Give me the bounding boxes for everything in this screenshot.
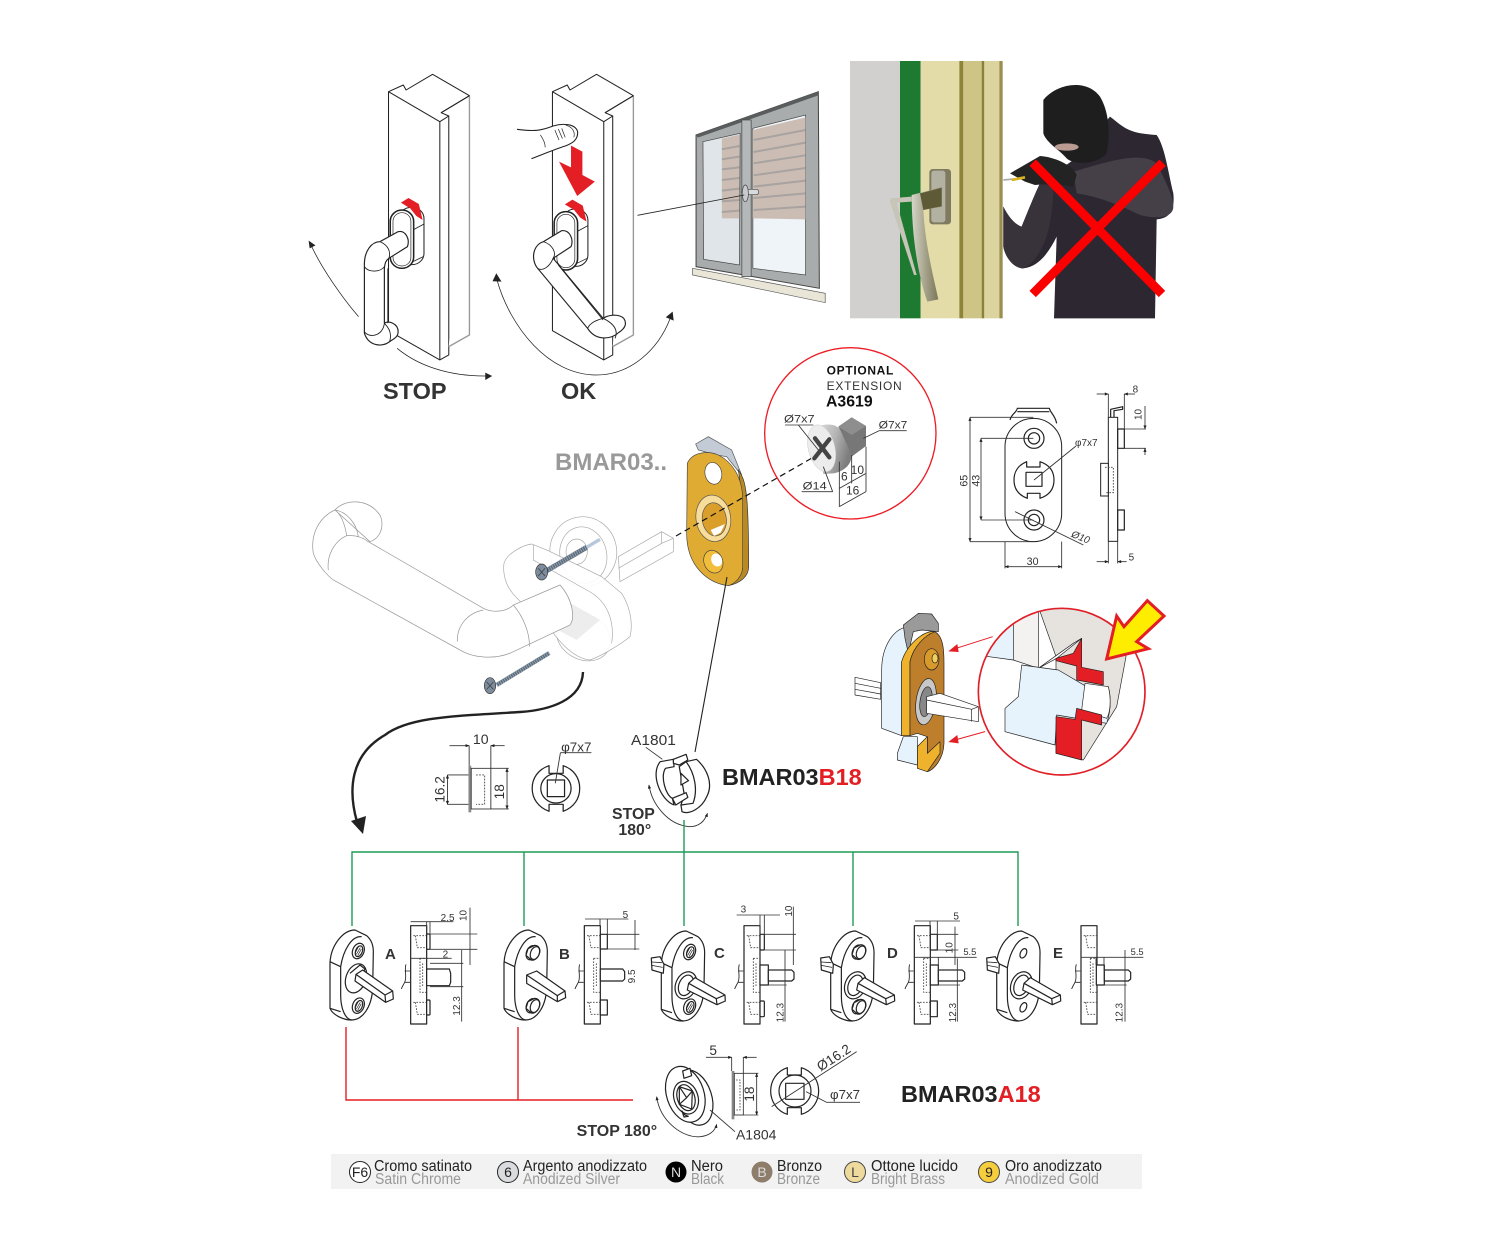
product code: BMAR03A18: BMAR03A18 [901, 1081, 1041, 1107]
plate front dimensions: 30 [1027, 556, 1039, 568]
extension dimensions: 10 [851, 463, 864, 477]
finish: satin chrome: Cromo satinato [374, 1158, 472, 1175]
finish: bright brass [844, 1158, 958, 1188]
finish: anodized silver: Anodized Silver [523, 1171, 620, 1188]
variant D dimensions: 5 [953, 912, 959, 923]
leader: A1801 [646, 747, 662, 759]
variant E dimensions: 12.3 [1115, 1002, 1126, 1022]
variant D dimensions: 12.3 [948, 1002, 959, 1022]
label: A1801: A1801 [631, 732, 676, 749]
A1804 stop part [659, 1061, 720, 1130]
side dimension drawing: 16.2 [431, 776, 447, 803]
finish: bronze: Bronzo [777, 1158, 822, 1175]
plate front view [1005, 408, 1062, 542]
label: variant C: C [714, 945, 725, 962]
extension dimensions: Ø14 [803, 480, 827, 492]
gold mounting plate [687, 437, 749, 586]
exploded handle illustration [313, 437, 749, 694]
finish: satin chrome: Satin Chrome [375, 1171, 461, 1188]
arrowhead: STOP right [485, 373, 492, 380]
arrow: A1804 rotation [657, 1097, 717, 1137]
finish: black: Nero [691, 1158, 723, 1175]
finish: bronze: Bronze [777, 1171, 820, 1188]
STOP handle illustration [364, 74, 469, 360]
arrow: yellow pointer [1107, 601, 1164, 659]
photo: burglar [1003, 85, 1174, 318]
variant B dimensions [585, 910, 639, 983]
label: EXTENSION: EXTENSION [827, 379, 902, 393]
OK handle illustration [534, 74, 633, 360]
variant A side [401, 926, 451, 1024]
label: 180 degrees: 180° [618, 822, 651, 839]
finish: anodized silver [498, 1158, 647, 1188]
finish: anodized silver: Argento anodizzato [523, 1158, 647, 1175]
label: A3619: A3619 [826, 394, 873, 411]
legend background [331, 1154, 1142, 1189]
variant B side [575, 926, 625, 1024]
zoom detail circle [978, 608, 1146, 776]
label: OPTIONAL: OPTIONAL [827, 364, 893, 378]
variant B dimensions: 9.5 [627, 969, 638, 983]
panel: photo of handle and burglar [850, 61, 1174, 318]
variant A dimensions: 12.3 [452, 996, 463, 1016]
label: A1804: A1804 [736, 1126, 777, 1142]
variant C side [735, 926, 794, 1024]
arrow: press down [559, 146, 595, 196]
front dimension drawing [532, 740, 591, 811]
screw: lower [484, 653, 549, 694]
variant D plate [821, 931, 895, 1021]
arrowhead: bottom pointer [948, 735, 959, 743]
A1801 stop part [656, 754, 710, 813]
plate side view [1101, 407, 1124, 541]
variant A dimensions: 10 [459, 909, 470, 921]
variant C dimensions [737, 904, 796, 1022]
arrowhead: top pointer [948, 644, 959, 652]
side dimension drawing: 10 [473, 731, 489, 747]
front dimension drawing [771, 1041, 860, 1114]
connector: red lines [346, 1027, 633, 1100]
finish: bronze: B [757, 1164, 767, 1180]
finish: anodized silver: 6 [504, 1164, 512, 1180]
panel: BMAR03A18 option [577, 1041, 860, 1142]
variant A dimensions: 2 [443, 949, 449, 960]
variant E dimensions [1081, 947, 1144, 1022]
red cross [1033, 163, 1163, 294]
finish: anodized gold [978, 1158, 1102, 1188]
label: STOP: STOP [383, 378, 447, 404]
curved arrow [352, 672, 583, 822]
arrow: OK rotation sweep [497, 280, 670, 375]
label: OK: OK [561, 378, 596, 404]
finish: black [666, 1158, 724, 1188]
side dimension drawing: 5 [709, 1043, 717, 1058]
arrow: stop rotation [649, 785, 707, 827]
plate front dimensions: Ø10 [1069, 529, 1092, 547]
variant A [330, 908, 477, 1024]
finish: anodized gold: Oro anodizzato [1005, 1158, 1102, 1175]
arrow: STOP rotation left [311, 245, 359, 317]
window illustration [693, 92, 825, 303]
product code: BMAR03B18: BMAR03B18 [722, 764, 862, 790]
plate side dimensions: 8 [1133, 385, 1139, 396]
variant C plate [651, 931, 725, 1021]
arrowhead: curved arrow [351, 816, 366, 834]
finish: satin chrome [350, 1158, 472, 1188]
finish: bronze [752, 1158, 822, 1188]
finish: anodized gold: Anodized Gold [1005, 1171, 1099, 1188]
label: variant E: E [1053, 945, 1063, 962]
extension dimensions [784, 414, 907, 507]
dashed axis line [676, 458, 812, 536]
connector: green tree [352, 820, 1018, 926]
leader line to window handle [638, 195, 744, 215]
extension part [803, 417, 866, 475]
plate front dimensions: φ7x7 [1075, 438, 1098, 449]
plate front dimensions: 65 [958, 475, 970, 487]
variant C dimensions: 10 [784, 905, 795, 917]
arrowhead: OK left [493, 273, 501, 282]
variant B dimensions: 5 [623, 910, 629, 921]
arrow: bottom pointer [955, 732, 985, 740]
finish: bright brass: Bright Brass [871, 1171, 945, 1188]
variant B plate [504, 930, 566, 1020]
variant D dimensions [915, 912, 977, 1022]
arrow: STOP rotation right [397, 348, 488, 376]
plate front dimensions: 43 [970, 475, 982, 487]
variant A dimensions [411, 908, 477, 1022]
screw: upper [536, 539, 600, 580]
icon: finger pressing [517, 124, 578, 159]
variant D dimensions: 5.5 [963, 947, 976, 957]
red circle [765, 348, 936, 519]
variant C dimensions: 3 [741, 904, 747, 915]
label: variant D: D [887, 945, 898, 962]
variant A plate [330, 930, 393, 1020]
leader: A1804 [710, 1110, 735, 1132]
variant D side [905, 926, 965, 1024]
label: STOP 180: STOP [612, 806, 655, 823]
label: STOP 180: STOP 180° [577, 1123, 657, 1140]
arrowhead: OK right [666, 312, 674, 321]
photo: window handle [890, 169, 951, 302]
variant E dimensions: 5.5 [1131, 947, 1144, 957]
side dimension drawing [706, 1043, 758, 1119]
extension dimensions: Ø7x7 [879, 420, 907, 432]
photo: window frame [850, 61, 1003, 318]
plate side dimensions: 5 [1129, 553, 1135, 564]
variant E plate [987, 931, 1061, 1021]
handle rosette back [543, 511, 673, 670]
variant C dimensions: 12.3 [775, 1002, 786, 1022]
finish: bright brass: L [851, 1164, 859, 1180]
variant C [651, 904, 796, 1024]
panel: BMAR03B18 option [431, 731, 710, 839]
variant A dimensions: 2.5 [441, 913, 455, 924]
lever handle [313, 502, 573, 657]
leader: plate to A1801 [695, 577, 727, 752]
front dimension drawing: φ7x7 [830, 1088, 860, 1102]
front dimension drawing: Ø16.2 [814, 1041, 853, 1074]
finish: anodized gold: 9 [985, 1164, 993, 1180]
extension dimensions: 6 [841, 470, 848, 484]
plate front dimensions [958, 417, 1098, 568]
panel: finish legend [331, 1154, 1142, 1189]
plate side dimensions: 10 [1134, 408, 1145, 420]
variant D dimensions: 10 [945, 942, 956, 953]
technical drawing: plate front and side [958, 385, 1146, 568]
label: variant B: B [559, 946, 570, 963]
side dimension drawing: 18 [742, 1086, 757, 1102]
cutaway mechanism [855, 613, 978, 772]
arrow: top pointer [955, 637, 993, 649]
variant D [821, 912, 977, 1024]
extension dimensions: Ø7x7 [784, 414, 815, 426]
arrowhead: STOP left [309, 241, 315, 248]
finish: black: N [671, 1164, 681, 1180]
label: variant A: A [385, 946, 396, 963]
finish: black: Black [691, 1171, 724, 1188]
product code: BMAR03..: BMAR03.. [555, 449, 667, 476]
side dimension drawing: 18 [491, 784, 507, 799]
extension dimensions: 16 [846, 484, 860, 498]
handle rosette front [504, 544, 631, 660]
variant E side [1072, 926, 1131, 1024]
finish: bright brass: Ottone lucido [871, 1158, 958, 1175]
panel: handle operation diagrams [309, 74, 825, 380]
plate side dimensions [1097, 385, 1146, 564]
finish: satin chrome: F6 [352, 1164, 368, 1180]
variant E [987, 926, 1144, 1024]
panel: cutaway detail [855, 601, 1164, 783]
variant B [504, 910, 639, 1024]
front dimension drawing: φ7x7 [561, 740, 591, 755]
panel: optional extension callout [765, 348, 936, 519]
side dimension drawing [431, 731, 509, 812]
